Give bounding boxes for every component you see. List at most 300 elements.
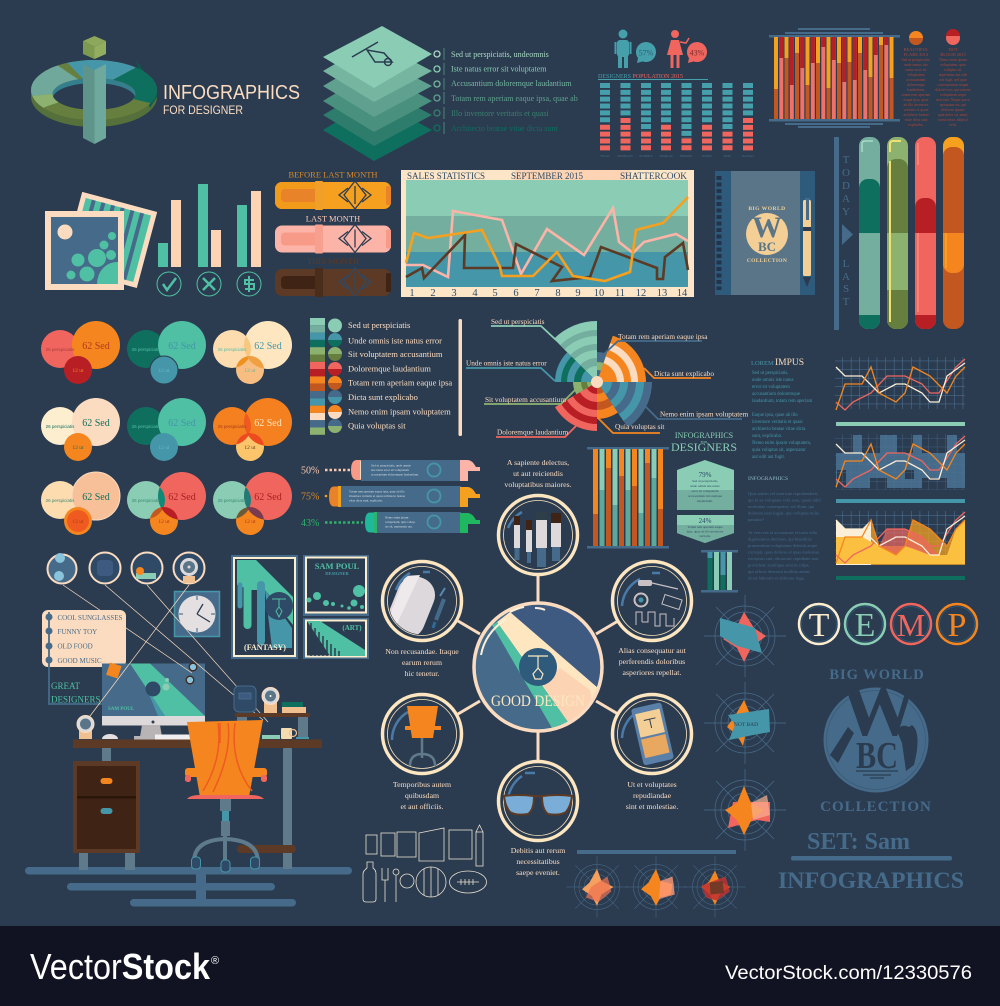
satellite: phone <box>612 694 692 774</box>
vertical labels <box>842 154 850 308</box>
venn set 6: 12 ut <box>244 445 256 451</box>
markers: monthly comparison <box>275 170 391 297</box>
designers population chart: INDIANA <box>680 154 693 158</box>
caption: headphones: Alias consequatur aut <box>618 646 687 655</box>
text block: lorem impus: Sed ut perspiciatis, <box>752 371 788 376</box>
side note: beautiful flare: vitae dicta sunt <box>904 118 928 122</box>
side note: not blood: consequuntur magni <box>938 83 968 87</box>
logo: ring with pillar <box>31 36 157 144</box>
label panel <box>42 610 126 704</box>
venn set 9: 12 ut <box>244 519 256 525</box>
text block: lorem impus: unde omnis iste natus <box>752 378 794 383</box>
caption: glasses: necessitatibus <box>516 857 560 866</box>
text block: infographics: qui officia deserunt mollitia animi, <box>748 569 811 575</box>
pens with percentages <box>301 460 480 533</box>
title: FOR DESIGNER <box>163 105 243 117</box>
pen 75%: 75% <box>301 492 319 502</box>
hexagon badge 24% <box>677 515 734 543</box>
designers population chart: KANSAS <box>742 154 754 158</box>
posters <box>231 555 369 659</box>
layer list text <box>434 48 578 134</box>
letter P: P <box>948 607 966 644</box>
text block: infographics: id est laborum et dolorum fuga. <box>748 576 805 580</box>
title: INFOGRAPHICS <box>163 82 300 104</box>
venn set 1: 62 Sed <box>82 341 110 352</box>
caption: headphones <box>618 646 687 677</box>
letter T <box>799 604 839 644</box>
hexagon badge 24%: veritatis. <box>699 534 711 538</box>
side note: beautiful flare: veritatis et quasi <box>904 108 928 112</box>
caption: brushes: A sapiente delectus, <box>507 458 569 467</box>
side note: not blood: voluptatem, quia <box>940 63 966 68</box>
legend labels: Quia voluptas sit <box>348 420 406 430</box>
text block: lorem impus: accusantium doloremque <box>752 392 800 397</box>
caption: mouse: earum rerum <box>402 658 442 667</box>
text block: infographics: excepturi sint, obcaecati cupiditate non <box>748 556 819 562</box>
venn set 8: 26 perspiciatis <box>132 498 161 503</box>
designers population chart: IDAHO <box>702 154 713 158</box>
x axis labels: 10 <box>594 288 604 299</box>
vertical labels: Y <box>842 206 850 218</box>
radar: not bad: NOT BAD <box>734 722 758 728</box>
record player right <box>262 688 279 713</box>
side note: not blood: voluptatem sequi <box>940 93 966 97</box>
side note: not blood <box>935 29 971 127</box>
x axis labels: 11 <box>615 288 625 299</box>
letter P <box>937 604 977 644</box>
text block: infographics: qui in ea voluptate velit esse, quam nihil <box>748 498 821 504</box>
side note: not blood: voluptas sit, <box>944 68 962 73</box>
radial labels: Totam rem aperiam eaque ipsa <box>618 332 708 341</box>
venn set 9 <box>213 472 292 535</box>
big world collection logo: COLLECTION <box>820 799 932 815</box>
venn set 8: 12 ut <box>158 519 170 525</box>
caption: chair: quibusdam <box>405 791 439 800</box>
side note: beautiful flare: Sed ut perspiciatis, <box>902 58 930 63</box>
layer list text: Totam rem aperiam eaque ipsa, quae ab <box>451 94 578 103</box>
heading: infographics for designers <box>671 431 737 454</box>
radial labels: Doloremque laudantium <box>497 428 568 436</box>
x axis labels: 4 <box>472 288 478 299</box>
designers population chart: OHIO <box>723 154 732 158</box>
venn set 7: 12 ut <box>72 519 84 525</box>
radial leader lines <box>466 326 742 437</box>
caption: glasses: saepe eveniet. <box>516 868 560 877</box>
text block: infographics: pariatur? <box>748 517 764 522</box>
marker: last month: LAST MONTH <box>306 214 360 224</box>
side note: beautiful flare: ab illo inventore <box>904 103 929 107</box>
posters: (FANTASY) <box>244 643 286 652</box>
shelf <box>235 702 310 739</box>
notebook logo <box>746 206 788 264</box>
text block: infographics: Quis autem vel eum iure reprehenderit, <box>748 491 818 497</box>
bubble 43% <box>687 42 707 63</box>
text block: lorem impus: laudantium, totam rem aperiam <box>752 399 812 404</box>
side note: beautiful flare: architecto beatae <box>903 113 929 117</box>
orange chair <box>185 720 267 872</box>
x axis labels: 8 <box>555 288 561 299</box>
text block: infographics: praesentium voluptatum deleniti atque <box>748 543 817 548</box>
side note: beautiful flare: BEAUTIFUL <box>904 47 929 52</box>
caption: mouse: hic tenetur. <box>405 669 439 678</box>
label panel: GOOD MUSIC <box>58 657 102 665</box>
footer band: VectorStock <box>30 946 211 987</box>
label panel: DESIGNERS <box>51 694 101 704</box>
text block: infographics: INFOGRAPHICS <box>748 476 788 482</box>
hexagon badge 79%: unde omnis iste natus <box>690 484 720 488</box>
big world collection logo: BIG WORLD <box>829 667 925 683</box>
x axis labels: 14 <box>677 288 688 299</box>
vertical labels: A <box>842 271 850 283</box>
letter M <box>891 604 931 644</box>
text block: lorem impus: architecto beatae vitae dicta <box>752 427 806 432</box>
legend labels: Doloremque laudantium <box>348 364 431 374</box>
venn set 3: 12 ut <box>244 368 256 374</box>
vertical labels: T <box>843 154 850 166</box>
big world collection logo: W <box>840 665 918 752</box>
notebook logo: BC <box>758 239 776 254</box>
bubble 43%: 43% <box>690 48 705 58</box>
pen 43%: Nemo enim ipsam <box>385 516 409 520</box>
radial labels: Nemo enim ipsam voluptatem <box>660 410 748 418</box>
notebook logo: BIG WORLD <box>748 206 786 212</box>
chart header text <box>407 172 687 182</box>
side note: beautiful flare: doloremque <box>907 83 925 87</box>
layer list text: Sed ut perspiciatis, undeomnis <box>451 50 549 59</box>
letter T: T <box>809 607 830 644</box>
label panel: OLD FOOD <box>58 642 93 650</box>
hexagon badge 79%: accusantium doloremque <box>688 494 722 498</box>
chart header text: SEPTEMBER 2015 <box>511 172 583 182</box>
posters: DESIGNER <box>325 571 349 576</box>
footer band: ® <box>211 955 219 967</box>
venn set 9: 26 perspiciatis <box>218 498 247 503</box>
small bar chart with icons <box>157 184 261 296</box>
good design hub diagram <box>382 458 692 877</box>
x axis labels: 7 <box>534 288 540 299</box>
side note: beautiful flare: voluptatem <box>907 73 925 77</box>
side note: beautiful flare: natus error sit <box>906 68 927 72</box>
tube: orange <box>943 137 964 329</box>
notebook logo: W <box>752 211 782 244</box>
venn set 7 <box>41 472 120 535</box>
designers population chart: GEORGIA <box>659 154 674 158</box>
caption: brushes: ut aut reiciendis <box>513 469 563 478</box>
text block: lorem impus: Eaque ipsa, quae ab illo <box>752 413 798 418</box>
letter M: M <box>897 607 925 643</box>
venn set 4: 62 Sed <box>82 418 110 429</box>
pen 43% <box>301 512 480 533</box>
pen 50% <box>301 460 480 481</box>
venn set 6: 62 Sed <box>254 418 282 429</box>
x axis labels <box>409 288 688 299</box>
tube: teal <box>859 137 880 329</box>
radar: small 3 <box>684 856 746 918</box>
side note: beautiful flare: explicabo. <box>908 123 924 127</box>
hexagon badge 24%: ipsa, quae ab illo inventore <box>687 530 724 534</box>
venn set 1: 12 ut <box>72 368 84 374</box>
photo frames <box>45 192 157 290</box>
pen <box>803 198 811 287</box>
stacked bars <box>605 83 748 152</box>
side note: not blood: quia dolor sit, amet, <box>938 113 968 118</box>
legend labels: Dicta sunt explicabo <box>348 392 418 402</box>
text block: infographics: provident, similique sunt in culpa, <box>748 562 810 568</box>
radar: top <box>704 595 786 677</box>
colour legend <box>310 318 462 436</box>
heading: infographics for designers: DESIGNERS <box>671 440 737 454</box>
venn set 1 <box>41 321 120 384</box>
venn set 6: 26 perspiciatis <box>218 424 247 429</box>
venn set 1: 26 perspiciatis <box>46 347 75 352</box>
big world collection logo: SET: Sam <box>807 829 910 855</box>
posters: (ART) <box>342 624 362 632</box>
hexagon badge 79%: Sed ut perspiciatis, <box>692 479 718 484</box>
caption: brushes <box>504 458 572 489</box>
text block: lorem impus <box>751 358 812 460</box>
venn set 3: 62 Sed <box>254 341 282 352</box>
venn set 3: 26 perspiciatis <box>218 347 247 352</box>
chart header text: SHATTERCOOK <box>620 172 687 182</box>
heading: infographics for designers: INFOGRAPHICS <box>675 431 733 440</box>
floor <box>25 867 352 906</box>
text block: lorem impus: IMPUS <box>775 358 804 368</box>
radial labels: Dicta sunt explicabo <box>654 369 714 378</box>
legend labels: Totam rem aperiam eaque ipsa <box>348 378 452 388</box>
side note: beautiful flare: laudantium, <box>907 88 925 93</box>
venn set 7: 62 Sed <box>82 492 110 503</box>
footer band <box>0 926 1000 1006</box>
satellite: headphones and circuit <box>612 562 692 640</box>
side note: beautiful flare: totam rem aperiam <box>902 93 930 97</box>
venn set 8 <box>127 472 206 535</box>
radial sector chart <box>466 317 748 443</box>
designer desk scene <box>25 552 369 906</box>
caption: chair: Temporibus autem <box>393 780 451 789</box>
venn set 2: 26 perspiciatis <box>132 347 161 352</box>
pen 50%: iste natus error sit voluptatem <box>371 468 409 472</box>
vertical labels: S <box>843 283 849 295</box>
venn set 2: 62 Sed <box>168 341 196 352</box>
venn set 6 <box>213 398 292 461</box>
line chart: area fill <box>835 511 965 580</box>
vertical labels: T <box>843 296 850 308</box>
central hub: GOOD DESIGN <box>491 693 585 710</box>
icon: dollar <box>237 272 261 296</box>
chart title: DESIGNERS POPULATION 2015 <box>598 74 683 80</box>
caption: headphones: perferendis doloribus <box>619 657 685 666</box>
today / last scale <box>834 137 853 330</box>
radial labels <box>466 317 748 436</box>
small column chart <box>701 550 738 592</box>
caption: phone: repudiandae <box>633 791 672 800</box>
caption: glasses <box>511 846 565 877</box>
venn set 5: 26 perspiciatis <box>132 424 161 429</box>
vertical labels: O <box>842 167 850 179</box>
vertical labels: A <box>842 193 850 205</box>
toy monster <box>234 686 256 712</box>
layer list text: Architecto beatae vitae dicta sunt <box>451 124 558 133</box>
venn set 4: 26 perspiciatis <box>46 424 75 429</box>
hexagon badge 79%: error sit voluptatem <box>692 489 719 493</box>
caption: mouse: Non recusandae. Itaque <box>385 647 459 656</box>
circle callouts <box>48 552 268 722</box>
legend labels: Sit voluptatem accusantium <box>348 349 443 359</box>
satellite: chair <box>382 694 462 774</box>
side note: not blood: dolores eos, qui ratione <box>935 88 971 93</box>
venn set 3 <box>213 321 292 384</box>
side note: not blood: velit. <box>949 123 957 127</box>
vertical labels: D <box>842 180 850 192</box>
legend labels: Unde omnis iste natus error <box>348 336 442 346</box>
text block: lorem impus: aut odit aut fugit. <box>752 455 785 460</box>
venn set 4: 12 ut <box>72 445 84 451</box>
bubble 57%: 57% <box>639 48 654 58</box>
venn set 5: 12 ut <box>158 445 170 451</box>
stacked layers with list <box>323 26 578 161</box>
text block: infographics: dignissimos ducimus, qui blanditiis <box>748 536 812 542</box>
venn set 5 <box>127 398 206 461</box>
pen 50%: Sed ut perspiciatis, unde omnis <box>371 464 412 468</box>
caption: chair: et aut officiis. <box>401 802 444 811</box>
radar: small 2 <box>625 856 687 918</box>
posters: SAM POUL <box>315 561 360 571</box>
text block: lorem impus: quia voluptas sit, aspernatur <box>752 448 806 453</box>
connectors <box>458 575 618 762</box>
tube: red <box>915 137 936 329</box>
x axis labels: 9 <box>575 288 581 299</box>
radar shapes <box>566 595 786 918</box>
satellite: brushes <box>498 496 578 574</box>
pen 75%: Totam rem aperiam eaque ipsa, quae ab illo <box>349 490 405 494</box>
central hub <box>474 600 610 735</box>
text block: lorem impus: sunt, explicabo. <box>752 434 782 439</box>
column chart with capitals <box>587 447 669 548</box>
text block: lorem impus: Nemo enim ipsam voluptatem, <box>752 441 811 446</box>
icon: pen tool on layer <box>352 42 392 66</box>
line chart: block background <box>835 434 965 503</box>
pen 43%: 43% <box>301 518 319 529</box>
desk <box>73 740 322 870</box>
caption: phone: Ut et voluptates <box>627 780 677 789</box>
venn set 9: 62 Sed <box>254 492 282 503</box>
letter E: E <box>855 607 875 644</box>
icon: male figure <box>614 30 632 68</box>
monitor: SAM POUL <box>108 707 135 712</box>
caption: glasses: Debitis aut rerum <box>511 846 565 855</box>
side note: not blood: aut fugit, sed quia <box>939 78 967 83</box>
venn set 2: 12 ut <box>158 368 170 374</box>
caption: mouse <box>385 647 459 678</box>
footer band: VectorStock.com/12330576 <box>725 963 972 984</box>
title <box>163 82 300 117</box>
x axis labels: 5 <box>492 288 498 299</box>
hexagon badge 79%: 79% <box>699 471 712 479</box>
satellite: glasses <box>498 762 578 840</box>
colonnade bar chart <box>769 28 971 128</box>
label panel: GREAT <box>51 681 81 691</box>
side note: not blood: dolorem ipsum, <box>941 108 965 113</box>
hexagon badge 79% <box>677 460 734 510</box>
caption: phone: sint et molestiae. <box>626 802 678 811</box>
glasses on monitor <box>186 663 197 684</box>
x axis labels: 2 <box>430 288 436 299</box>
designers population chart: TEXAS <box>600 154 610 158</box>
big world collection logo <box>778 665 964 893</box>
side note: not blood: nesciunt. Neque porro <box>936 98 970 102</box>
icon: pen nib <box>519 648 557 686</box>
radial labels: Unde omnis iste natus error <box>466 358 547 368</box>
side note: beautiful flare: unde omnis iste <box>904 63 928 67</box>
icon: cross <box>197 272 221 296</box>
x axis labels: 1 <box>409 288 415 299</box>
icon: female figure <box>667 30 689 68</box>
designers population chart <box>598 30 754 158</box>
line chart: grid <box>835 357 965 426</box>
vertical labels: L <box>843 258 850 270</box>
text block: infographics: dolorem eum fugiat, quo voluptas nulla <box>748 510 819 516</box>
legend labels <box>348 320 452 430</box>
pen 75% <box>301 486 480 507</box>
caption: phone <box>626 780 678 811</box>
text block: infographics: corrupti, quos dolores et quas molestias <box>748 550 819 556</box>
venn set 8: 62 Sed <box>168 492 196 503</box>
desk items: record, mouse, keyboard, mug <box>77 716 296 740</box>
letters T E M P <box>799 604 977 644</box>
pen 43%: voluptatem, quia volup- <box>385 520 416 525</box>
side note: not blood: consectetur, adipisci <box>938 118 968 123</box>
radar: not bad <box>704 682 786 764</box>
radar: small 1 <box>566 856 628 918</box>
sales statistics line chart <box>401 170 694 299</box>
layer list text: Illo inventore veritatis et quasi <box>451 109 550 118</box>
line icon set <box>363 825 486 902</box>
x axis labels: 12 <box>636 288 646 299</box>
venn set 4 <box>41 398 120 461</box>
side note: not blood: NOT <box>948 47 958 52</box>
pen 43%: tas sit, aspernatur aut. <box>385 524 413 530</box>
letter E <box>845 604 885 644</box>
tube: green <box>887 137 908 329</box>
x axis labels: 13 <box>657 288 667 299</box>
side note: not blood: Nemo enim ipsam <box>939 58 967 62</box>
text block: lorem impus: error sit voluptatem <box>752 385 790 390</box>
pen 75%: inventore veritatis et quasi architecto beatae <box>349 494 406 498</box>
side note: beautiful flare: FLARE 2014 <box>904 52 929 57</box>
legend labels: Nemo enim ipsam voluptatem <box>348 406 451 416</box>
wall clock <box>174 592 220 636</box>
text block: infographics: molestiae consequatur, vel illum, qui <box>748 504 815 510</box>
radial labels: Quia voluptas sit <box>615 422 664 431</box>
venn set 2 <box>127 321 206 384</box>
side note: beautiful flare: eaque ipsa, quae <box>904 98 929 103</box>
text block: infographics: At vero eos et accusamus et iusto odio <box>748 530 818 535</box>
text block: infographics <box>748 476 821 580</box>
pen 75%: vitae dicta sunt, explicabo. <box>349 498 383 504</box>
label panel: FUNNY TOY <box>58 628 97 636</box>
chart header text: SALES STATISTICS <box>407 172 485 182</box>
caption: brushes: voluptatibus maiores. <box>504 480 572 489</box>
x axis labels: 3 <box>451 288 457 299</box>
marker: this month: THIS MONTH <box>307 256 359 266</box>
caption: chair <box>393 780 451 811</box>
side note: not blood: quisquam est, qui <box>940 103 966 108</box>
big world collection logo: BC <box>856 735 898 777</box>
side note: not blood: BLOOD 2015 <box>940 52 967 57</box>
radar: orange <box>704 769 786 851</box>
notebook logo: COLLECTION <box>747 258 787 264</box>
venn set 7: 26 perspiciatis <box>46 498 75 503</box>
